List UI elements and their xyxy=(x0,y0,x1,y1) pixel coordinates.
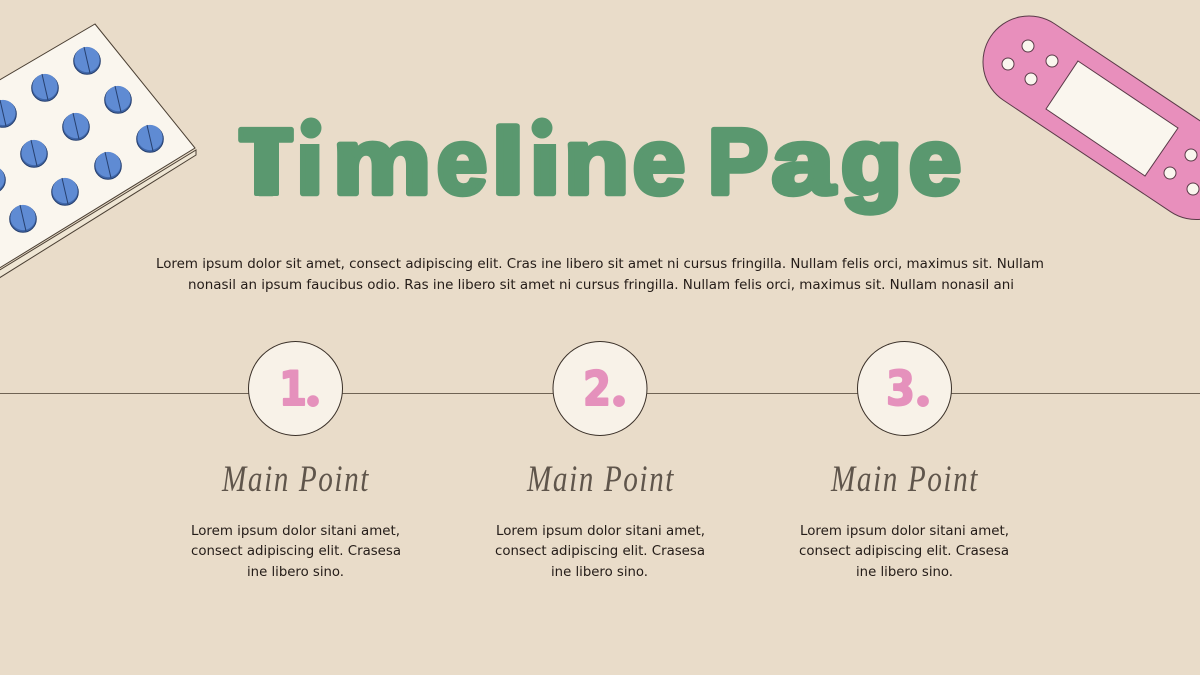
description 2: ine libero sino. xyxy=(551,565,648,580)
title: e xyxy=(437,110,487,214)
description 1 xyxy=(191,524,401,580)
number badge 1 xyxy=(248,342,342,436)
title: n xyxy=(564,110,629,214)
description 2 xyxy=(495,524,705,580)
description 3 xyxy=(799,524,1009,580)
title: i xyxy=(296,110,324,214)
description 3: ine libero sino. xyxy=(856,565,953,580)
description 1: Lorem ipsum dolor sitani amet, xyxy=(191,524,400,539)
title xyxy=(240,110,961,214)
title: T xyxy=(240,110,292,214)
number badge 3: 3 xyxy=(886,362,915,417)
description 3: Lorem ipsum dolor sitani amet, xyxy=(800,524,1009,539)
description 2: consect adipiscing elit. Crasesa xyxy=(495,544,705,559)
description 3: consect adipiscing elit. Crasesa xyxy=(799,544,1009,559)
number badge 3 xyxy=(858,342,952,436)
description 1: ine libero sino. xyxy=(247,565,344,580)
number badge 1: 1 xyxy=(279,362,307,417)
description 2: Lorem ipsum dolor sitani amet, xyxy=(496,524,705,539)
title: l xyxy=(491,110,525,214)
intro text block: Lorem ipsum dolor sit amet, consect adipiscing elit. Cras ine libero sit amet ni cursus fringilla. Nullam felis orci, maximus sit. Nullam xyxy=(156,257,1044,272)
panel: point 1 xyxy=(191,342,401,580)
heading 3: Main Point xyxy=(830,459,979,500)
heading 1: Main Point xyxy=(221,459,370,500)
title: e xyxy=(633,110,685,214)
title: m xyxy=(333,110,431,214)
number badge 2 xyxy=(553,342,647,436)
heading 2: Main Point xyxy=(526,459,675,500)
number badge 2: 2 xyxy=(583,362,611,417)
icon: pink bandage xyxy=(965,0,1200,237)
panel: point 2 xyxy=(495,342,705,580)
title: e xyxy=(909,110,961,214)
title: g xyxy=(841,110,902,214)
intro text block xyxy=(156,257,1044,293)
number badge 1: . xyxy=(306,352,320,418)
title: P xyxy=(708,110,768,214)
title: a xyxy=(772,110,836,214)
intro text block: nonasil an ipsum faucibus odio. Ras ine libero sit amet ni cursus fringilla. Nullam felis orci, maximus sit. Nullam nonasil ani xyxy=(188,278,1014,293)
title: i xyxy=(529,110,561,214)
icon: blister pack of blue pills xyxy=(0,24,196,290)
timeline line xyxy=(0,392,1200,394)
description 1: consect adipiscing elit. Crasesa xyxy=(191,544,401,559)
number badge 2: . xyxy=(612,352,626,418)
number badge 3: . xyxy=(916,352,930,418)
panel: point 3 xyxy=(799,342,1009,580)
